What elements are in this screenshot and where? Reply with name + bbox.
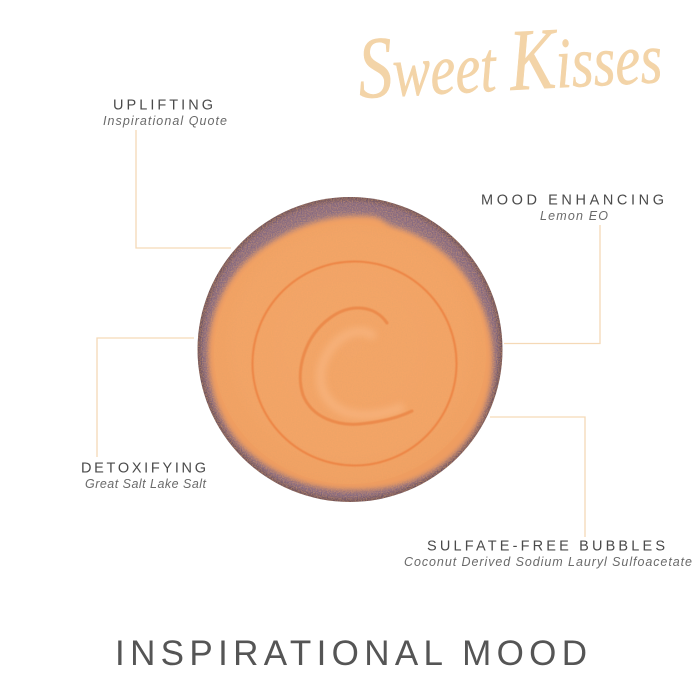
callout: sulfate-free bubbles xyxy=(404,417,692,569)
callout: uplifting xyxy=(103,98,231,248)
label: coconut derived ingredient: Coconut Derived Sodium Lauryl Sulfoacetate xyxy=(404,555,692,569)
title: Sweet Kisses: Sweet Kisses xyxy=(355,5,664,118)
label: mood enhancing heading: MOOD ENHANCING xyxy=(481,192,664,208)
callout: mood enhancing xyxy=(481,192,664,344)
footer title: inspirational mood: INSPIRATIONAL MOOD xyxy=(115,634,587,673)
label: great salt lake salt: Great Salt Lake Salt xyxy=(85,477,207,491)
core texture xyxy=(214,224,486,484)
label: detoxifying heading: DETOXIFYING xyxy=(81,460,206,476)
label: lemon EO: Lemon EO xyxy=(540,209,608,223)
label: inspirational quote: Inspirational Quote xyxy=(103,114,227,128)
leader line: detoxifying xyxy=(97,338,194,457)
inner C stroke xyxy=(300,308,412,424)
purple rim xyxy=(198,197,502,502)
inner C fill highlight xyxy=(321,332,400,415)
outer ring xyxy=(252,262,456,466)
orange core xyxy=(208,216,493,490)
callout: detoxifying xyxy=(81,338,207,491)
leader line: uplifting xyxy=(136,130,231,248)
leader line: mood enhancing xyxy=(504,225,600,344)
bath bomb xyxy=(198,197,502,502)
label: uplifting heading: UPLIFTING xyxy=(113,98,213,114)
leader line: sulfate-free xyxy=(490,417,585,537)
label: sulfate-free heading: SULFATE-FREE BUBBLES xyxy=(427,538,665,554)
embossed spiral logo xyxy=(252,262,456,466)
